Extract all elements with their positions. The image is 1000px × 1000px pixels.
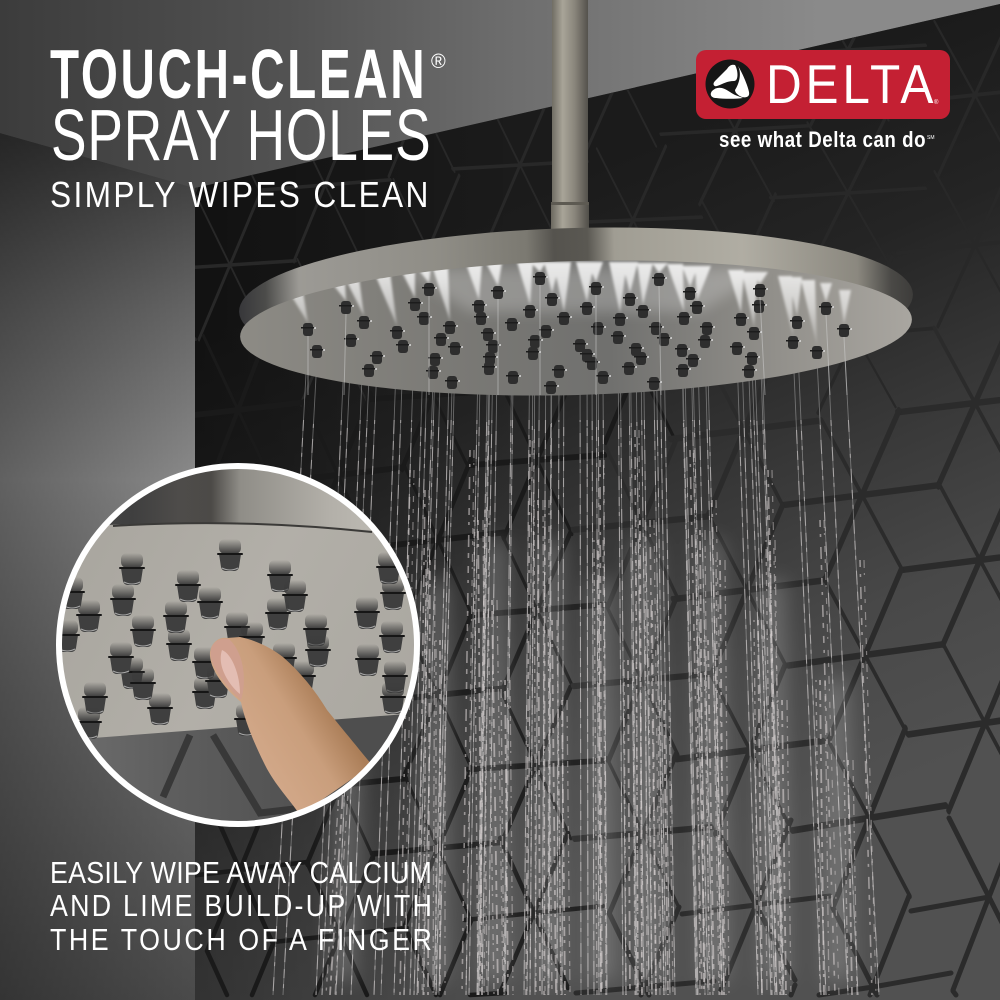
logo wordmark: DELTA: [766, 55, 933, 116]
Delta logo: [696, 50, 950, 152]
body copy: AND LIME BUILD-UP WITH: [50, 889, 432, 923]
magnified face plate: [50, 524, 420, 740]
logo icon: tri-lobed delta: [706, 60, 754, 108]
slogan service mark: SM: [927, 135, 934, 141]
tagline: SIMPLY WIPES CLEAN: SIMPLY WIPES CLEAN: [50, 175, 428, 215]
callout: magnified finger wiping nozzles: [50, 460, 425, 830]
shower head: [237, 219, 915, 404]
magnified rim: [110, 469, 372, 530]
ceiling background: [0, 0, 1000, 188]
shower head rim: [237, 219, 915, 387]
body copy: THE TOUCH OF A FINGER: [50, 923, 432, 957]
registered mark: ®: [431, 51, 446, 73]
magnifier white ring: [59, 466, 417, 824]
magnified wall below head: [90, 714, 400, 821]
fingernail: [211, 639, 244, 700]
droplet noise, lower offset right: [335, 500, 857, 995]
body copy: EASILY WIPE AWAY CALCIUM: [50, 856, 432, 890]
subtitle: SPRAY HOLES: SPRAY HOLES: [51, 96, 431, 176]
finger: [210, 637, 372, 815]
spray nozzles: [301, 272, 852, 394]
droplet noise, upper: [400, 430, 872, 995]
logo reg mark: ®: [934, 99, 939, 106]
logo slogan: see what Delta can do: [719, 129, 926, 152]
ceiling pipe: [551, 0, 589, 234]
logo red badge: [696, 50, 950, 119]
droplet noise, lower offset: [326, 500, 848, 995]
droplet noise, upper offset: [404, 430, 876, 995]
droplet noise, lower: [330, 500, 852, 995]
shower head face: [238, 252, 914, 404]
thin solid stream lines: [273, 285, 879, 995]
streams over face: [308, 285, 847, 395]
magnified nozzles: [54, 539, 408, 739]
left wall background: [0, 133, 195, 1000]
title: TOUCH-CLEAN: TOUCH-CLEAN: [50, 35, 425, 113]
white spray wisps: [289, 262, 851, 346]
body copy: [50, 856, 432, 957]
soft mist haze behind droplets: [342, 540, 838, 980]
broken stream droplets: [272, 420, 880, 995]
water streams: [272, 361, 880, 995]
